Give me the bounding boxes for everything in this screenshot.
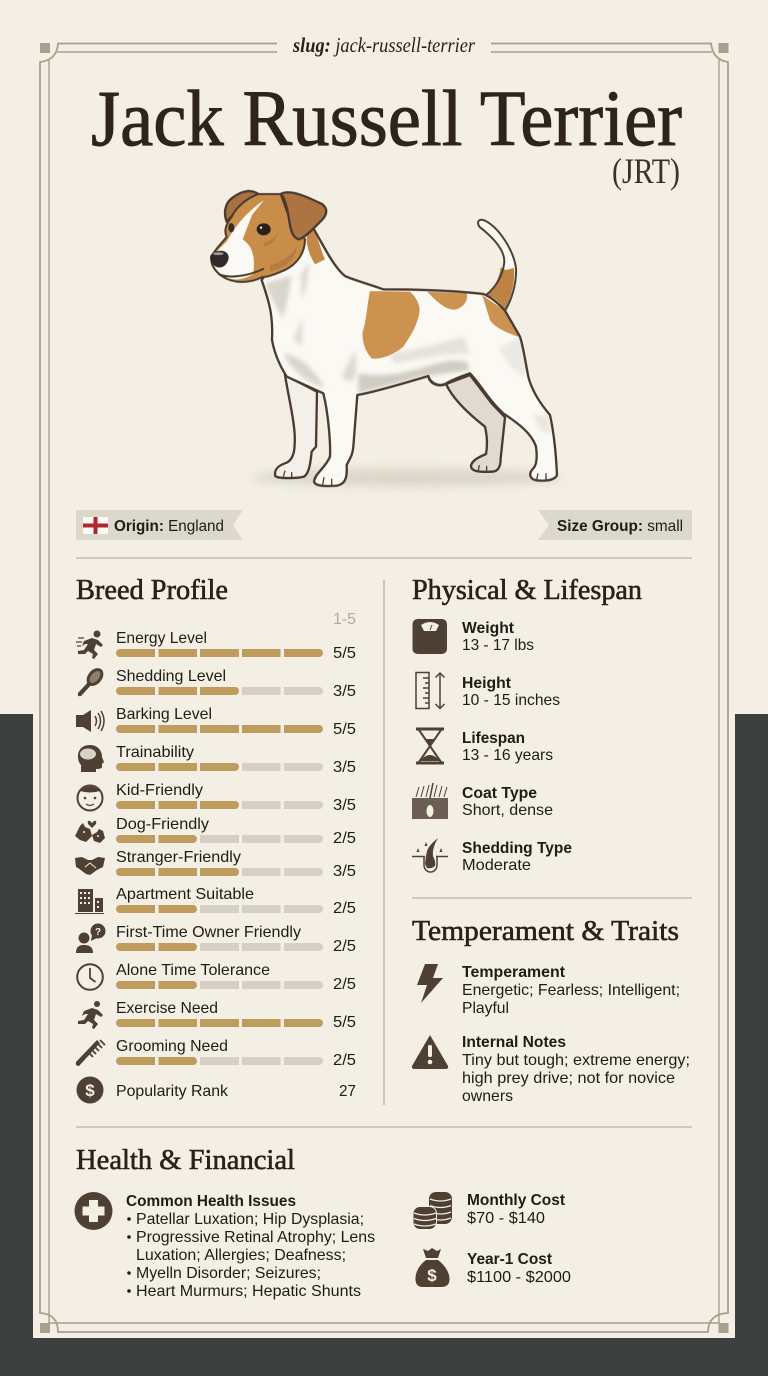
dog illustration bbox=[210, 191, 563, 487]
item: temperament: Playful bbox=[462, 1000, 509, 1017]
near ear bbox=[281, 192, 326, 239]
row: stranger-friendly bbox=[75, 849, 356, 880]
item: height: 10 - 15 inches bbox=[462, 692, 560, 709]
item: internal notes: owners bbox=[462, 1088, 513, 1105]
nose highlight bbox=[213, 252, 224, 255]
item: coat type: Short, dense bbox=[462, 802, 553, 819]
far front leg bbox=[275, 375, 317, 478]
icon: lightning bolt bbox=[417, 964, 443, 1003]
toe lines bbox=[283, 465, 546, 485]
origin text: Origin: England bbox=[114, 518, 224, 535]
row: shedding level: 3/5 bbox=[333, 683, 356, 700]
origin ribbon bbox=[76, 510, 243, 540]
icon: ruler and arrow bbox=[416, 672, 444, 708]
item: lifespan bbox=[416, 728, 553, 764]
item: common health issues: Patellar Luxation; Hip Dysplasia; bbox=[136, 1211, 364, 1228]
item: weight bbox=[412, 619, 534, 654]
icon: hair follicle shedding bbox=[412, 838, 448, 872]
row: trainability: Trainability bbox=[116, 744, 194, 761]
item: temperament bbox=[417, 964, 680, 1017]
row: alone time tolerance bbox=[77, 962, 356, 993]
item: internal notes: Tiny but tough; extreme energy; bbox=[462, 1052, 690, 1069]
row: kid-friendly: 3/5 bbox=[333, 797, 356, 814]
eye bbox=[257, 223, 271, 235]
row: barking level bbox=[76, 706, 356, 738]
icon: head with brain bbox=[78, 745, 104, 772]
row: barking level: Barking Level bbox=[116, 706, 212, 723]
icon: brush bbox=[78, 665, 107, 696]
icon: coin stacks bbox=[413, 1192, 452, 1230]
item: shedding type bbox=[412, 838, 572, 874]
mouth bbox=[218, 269, 264, 276]
row: alone time tolerance: Alone Time Tolerance bbox=[116, 962, 270, 979]
item: height: Height bbox=[462, 675, 512, 692]
item: internal notes: high prey drive; not for novice bbox=[462, 1070, 675, 1087]
eye highlight bbox=[260, 226, 262, 229]
icon: runner bbox=[78, 1001, 103, 1029]
panel: health and financial bbox=[74, 1144, 571, 1300]
row: first-time owner friendly: 2/5 bbox=[333, 938, 356, 955]
row: apartment suitable: Apartment Suitable bbox=[116, 886, 254, 903]
cream top band bbox=[0, 0, 768, 714]
item: year-1 cost bbox=[415, 1248, 571, 1287]
row: energy level: 5/5 bbox=[333, 645, 356, 662]
row: popularity rank: 27 bbox=[339, 1083, 356, 1100]
row: first-time owner friendly bbox=[76, 924, 356, 955]
row: kid-friendly bbox=[78, 782, 356, 814]
panel: breed profile bbox=[75, 574, 356, 1104]
row: shedding level bbox=[78, 665, 356, 700]
cream card bbox=[33, 700, 735, 1338]
icon: medical cross bbox=[74, 1192, 112, 1230]
item: internal notes bbox=[412, 1034, 690, 1105]
icon: two dogs and heart bbox=[75, 821, 105, 843]
item: monthly cost: Monthly Cost bbox=[467, 1192, 566, 1209]
row: dog-friendly: Dog-Friendly bbox=[116, 816, 209, 833]
scale label: 1-5 bbox=[333, 611, 356, 628]
heading: health and financial: Health & Financial bbox=[76, 1144, 295, 1176]
row: stranger-friendly: Stranger-Friendly bbox=[116, 849, 241, 866]
item: lifespan: 13 - 16 years bbox=[462, 747, 553, 764]
row: barking level: 5/5 bbox=[333, 721, 356, 738]
row: grooming need: 2/5 bbox=[333, 1052, 356, 1069]
item: temperament: Energetic; Fearless; Intelligent; bbox=[462, 982, 680, 999]
item: coat type: Coat Type bbox=[462, 785, 537, 802]
ground shadow bbox=[250, 468, 563, 487]
icon: money bag: $ bbox=[427, 1266, 437, 1285]
item: shedding type: Moderate bbox=[462, 857, 531, 874]
panel: temperament and traits bbox=[412, 915, 690, 1105]
row: trainability: 3/5 bbox=[333, 759, 356, 776]
icon: person with question: ? bbox=[95, 927, 101, 938]
title: Jack Russell Terrier bbox=[91, 76, 682, 163]
item: common health issues bbox=[74, 1192, 375, 1300]
far hind leg bbox=[446, 375, 505, 472]
far eye bbox=[228, 223, 234, 232]
row: energy level bbox=[76, 630, 356, 662]
item: year-1 cost: Year-1 Cost bbox=[467, 1251, 553, 1268]
row: stranger-friendly: 3/5 bbox=[333, 863, 356, 880]
heading: temperament and traits: Temperament & Traits bbox=[412, 915, 679, 947]
icon: apartment building bbox=[75, 889, 104, 914]
size group text: Size Group: small bbox=[557, 518, 683, 535]
row: exercise need: Exercise Need bbox=[116, 1000, 218, 1017]
body fill bbox=[262, 228, 557, 486]
item: monthly cost bbox=[413, 1192, 566, 1230]
item: lifespan: Lifespan bbox=[462, 730, 525, 747]
panel: physical and lifespan bbox=[412, 574, 642, 874]
row: energy level: Energy Level bbox=[116, 630, 207, 647]
icon: comb bbox=[76, 1040, 105, 1066]
icon: warning triangle bbox=[412, 1035, 448, 1069]
row: dog-friendly: 2/5 bbox=[333, 830, 356, 847]
row: kid-friendly: Kid-Friendly bbox=[116, 782, 203, 799]
row: exercise need: 5/5 bbox=[333, 1014, 356, 1031]
row: grooming need bbox=[76, 1038, 356, 1069]
icon: money bag bbox=[415, 1248, 450, 1287]
item: year-1 cost: $1100 - $2000 bbox=[467, 1269, 571, 1286]
icon: dollar coin bbox=[76, 1076, 104, 1104]
belly fold line bbox=[428, 377, 447, 385]
body outline bbox=[262, 228, 557, 486]
item: shedding type: Shedding Type bbox=[462, 840, 572, 857]
head bbox=[211, 194, 305, 282]
item: common health issues: Luxation; Allergies; Deafness; bbox=[136, 1247, 346, 1264]
icon: speaker bbox=[76, 710, 104, 732]
item: weight: 13 - 17 lbs bbox=[462, 637, 534, 654]
row: dog-friendly bbox=[75, 816, 356, 847]
icon: handshake bbox=[75, 857, 105, 875]
row: apartment suitable bbox=[75, 886, 356, 917]
row: shedding level: Shedding Level bbox=[116, 668, 226, 685]
tail tan patch bbox=[487, 267, 514, 309]
icon: clock bbox=[77, 964, 103, 990]
icon: hourglass bbox=[416, 728, 444, 764]
icon: person with question bbox=[76, 924, 106, 953]
row: grooming need: Grooming Need bbox=[116, 1038, 228, 1055]
slug line: slug: jack-russell-terrier bbox=[292, 33, 476, 57]
row: exercise need bbox=[78, 1000, 356, 1031]
far ear bbox=[225, 191, 258, 222]
item: weight: Weight bbox=[462, 620, 515, 637]
body shading and tan patches bbox=[265, 228, 552, 433]
icon: runner with speed lines bbox=[76, 630, 103, 659]
row: first-time owner friendly: First-Time Owner Friendly bbox=[116, 924, 301, 941]
heading: physical and lifespan: Physical & Lifespan bbox=[412, 574, 642, 606]
icon: hair follicle in skin bbox=[412, 783, 448, 819]
item: common health issues: Myelln Disorder; Seizures; bbox=[136, 1265, 321, 1282]
item: height bbox=[416, 672, 560, 709]
item: common health issues: Common Health Issues bbox=[126, 1193, 296, 1210]
cheek shading bbox=[263, 233, 297, 272]
row: popularity rank bbox=[76, 1076, 356, 1104]
row: alone time tolerance: 2/5 bbox=[333, 976, 356, 993]
item: coat type bbox=[412, 783, 553, 819]
head white blaze and muzzle bbox=[213, 200, 264, 279]
tail bbox=[478, 220, 516, 311]
item: internal notes: Internal Notes bbox=[462, 1034, 566, 1051]
item: monthly cost: $70 - $140 bbox=[467, 1210, 545, 1227]
row: popularity rank: Popularity Rank bbox=[116, 1083, 229, 1100]
title abbreviation: (JRT) bbox=[612, 151, 680, 191]
icon: scale bbox=[412, 619, 447, 654]
row: trainability bbox=[78, 744, 356, 776]
icon: dollar coin: $ bbox=[85, 1081, 95, 1100]
item: temperament: Temperament bbox=[462, 964, 566, 981]
item: common health issues: Progressive Retinal Atrophy; Lens bbox=[136, 1229, 375, 1246]
size group ribbon bbox=[538, 510, 692, 540]
row: apartment suitable: 2/5 bbox=[333, 900, 356, 917]
icon: child face bbox=[78, 786, 102, 810]
tail outline bbox=[478, 220, 516, 311]
heading: breed profile: Breed Profile bbox=[76, 574, 228, 606]
nose bbox=[210, 251, 229, 268]
item: common health issues: Heart Murmurs; Hepatic Shunts bbox=[136, 1283, 361, 1300]
England flag bbox=[83, 517, 108, 534]
